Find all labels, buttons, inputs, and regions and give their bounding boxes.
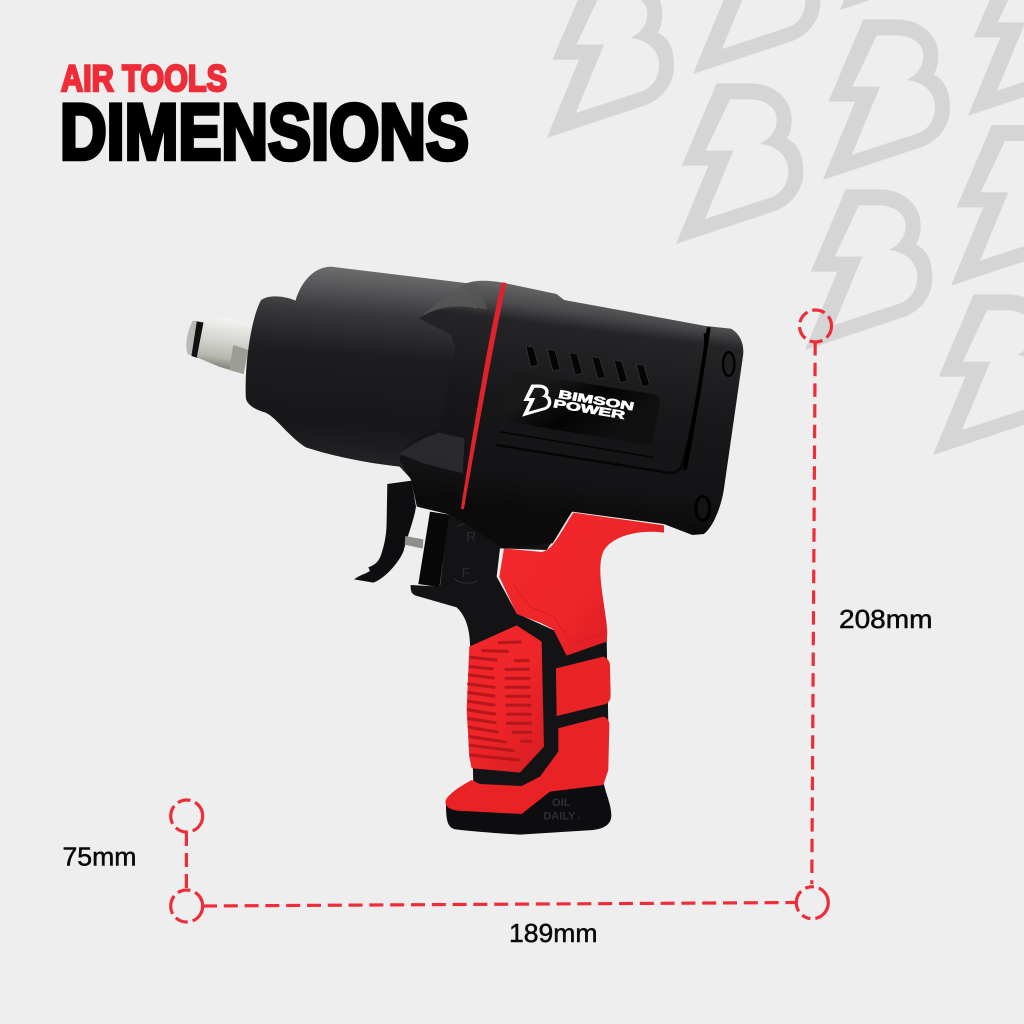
background pattern: lightning B logos — [547, 0, 1024, 455]
lower bolster highlight — [400, 433, 465, 473]
middle red grip panel — [556, 657, 611, 716]
label: 189mm: 189mm — [509, 918, 598, 948]
width right marker circle — [796, 887, 828, 919]
depth bottom marker circle — [171, 890, 203, 922]
base label: OIL DAILY: OIL — [552, 797, 571, 809]
trigger pin — [405, 536, 423, 549]
tool housing — [186, 267, 743, 548]
main heading: DIMENSIONS: DIMENSIONS — [60, 87, 469, 176]
height top marker circle — [800, 310, 832, 342]
title block — [60, 58, 469, 176]
panel groove lines — [497, 432, 668, 473]
dimension: depth 75mm — [171, 800, 203, 922]
lower red grip panel — [445, 717, 609, 814]
direction markers R and F: F — [462, 564, 470, 580]
brand wordmark — [552, 387, 635, 423]
brand wordmark: BIMSON — [557, 388, 635, 413]
shoulder highlight — [419, 283, 488, 319]
label: 75mm: 75mm — [62, 842, 136, 872]
product illustration: impact wrench — [186, 267, 743, 835]
hexagonal drive head — [197, 318, 256, 374]
grip ribs — [469, 642, 531, 760]
trigger and selector assembly — [354, 481, 452, 587]
brand wordmark: POWER — [552, 397, 627, 422]
glossy logo badge — [503, 373, 660, 445]
base label: OIL DAILY — [543, 797, 582, 822]
handle — [411, 507, 664, 835]
base cap — [446, 782, 611, 835]
depth top marker circle — [171, 800, 203, 832]
eyebrow heading: AIR TOOLS: AIR TOOLS — [61, 58, 227, 99]
base label: OIL DAILY: DAILY — [543, 810, 576, 822]
anvil o-ring — [191, 321, 204, 358]
vent slots — [526, 346, 650, 387]
width dashed line — [203, 902, 796, 906]
upper red grip — [499, 513, 664, 656]
trigger — [354, 481, 416, 583]
rear cap seam — [685, 327, 709, 470]
left ribbed red grip panel — [467, 625, 544, 773]
selector dial highlight — [440, 516, 450, 586]
base label: OIL DAILY: ↓ — [577, 811, 582, 822]
height dashed line — [812, 342, 815, 884]
drive head facet — [229, 345, 248, 374]
upper grip contour — [513, 585, 605, 643]
top rear screw — [723, 352, 734, 376]
dimension: height 208mm — [800, 310, 832, 884]
direction markers R and F — [453, 523, 484, 583]
anvil ring — [186, 321, 207, 359]
bottom rear screw — [696, 496, 710, 520]
dimension: width 189mm — [203, 887, 828, 919]
depth dashed line — [185, 832, 188, 889]
recessed side panel — [496, 333, 706, 473]
square drive anvil — [186, 318, 256, 374]
rear housing — [400, 281, 743, 548]
black neck and grip core — [411, 507, 608, 787]
label: 208mm: 208mm — [839, 604, 932, 634]
direction markers R and F: R — [466, 529, 476, 545]
selector dial — [418, 512, 452, 587]
brand lightning B logo — [522, 385, 551, 417]
red accent stripe — [461, 282, 506, 509]
front nose and hammer case — [246, 267, 476, 483]
